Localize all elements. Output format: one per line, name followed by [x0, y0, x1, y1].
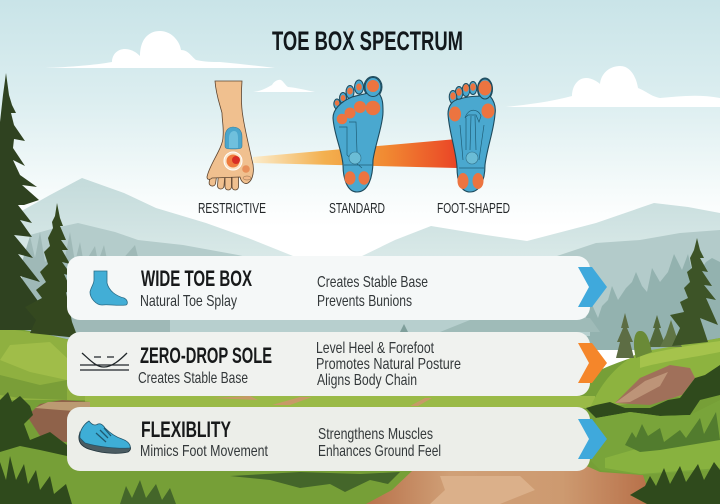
left second fir tree: [25, 203, 78, 338]
benefits: zero-drop sole: [316, 340, 461, 389]
label: standard: STANDARD: [329, 200, 385, 217]
foot: restrictive: [207, 81, 253, 190]
benefits: zero-drop sole: Promotes Natural Posture: [316, 356, 461, 373]
clouds: [45, 31, 720, 107]
hazy forest right: [575, 254, 720, 350]
panel: zero-drop sole: [67, 332, 607, 396]
subheading: natural toe splay: Natural Toe Splay: [140, 293, 237, 310]
subheading: mimics foot movement: Mimics Foot Movement: [140, 443, 268, 460]
icon: running shoe: [79, 421, 131, 453]
grass tufts: [590, 400, 720, 475]
benefits: flexibility: Strengthens Muscles: [318, 426, 433, 443]
foot: standard: [333, 76, 383, 192]
hazy forest left: [22, 232, 180, 340]
benefits: wide toe box: Creates Stable Base: [317, 274, 428, 291]
benefits: zero-drop sole: Aligns Body Chain: [317, 372, 417, 389]
chevron arrow: orange: [578, 343, 607, 383]
meadow: [0, 326, 720, 504]
icon: sock: [90, 271, 127, 305]
subheading: creates stable base: Creates Stable Base: [138, 370, 248, 387]
chevron arrow: blue: [578, 419, 607, 459]
benefits: wide toe box: [317, 274, 428, 310]
icon: zero-drop sole diagram: [80, 353, 129, 370]
heading: wide toe box: WIDE TOE BOX: [141, 266, 252, 291]
left rock: [27, 400, 90, 442]
benefits: wide toe box: Prevents Bunions: [317, 293, 412, 310]
small trees right: [616, 313, 682, 358]
chevron arrow: blue: [578, 267, 607, 307]
dark foliage: [0, 392, 67, 456]
panel: wide toe box: [67, 256, 607, 320]
benefits: zero-drop sole: Level Heel & Forefoot: [316, 340, 434, 357]
right rock: [615, 365, 695, 405]
label: restrictive: RESTRICTIVE: [198, 200, 266, 217]
dirt path: [366, 464, 647, 504]
benefits: flexibility: [318, 426, 441, 460]
label: foot-shaped: FOOT-SHAPED: [437, 200, 510, 217]
foot: foot-shaped: [448, 78, 495, 192]
far mountains: [0, 178, 298, 340]
left big fir tree: [0, 73, 55, 330]
panel: flexibility: [67, 407, 607, 471]
heading: zero-drop sole: ZERO-DROP SOLE: [140, 343, 272, 368]
heading: flexibility: FLEXIBLITY: [141, 417, 231, 442]
right fir tree: [670, 238, 718, 346]
benefits: flexibility: Enhances Ground Feel: [318, 443, 441, 460]
spectrum gradient bar: [253, 139, 457, 168]
title: TOE BOX SPECTRUM: [272, 26, 463, 56]
